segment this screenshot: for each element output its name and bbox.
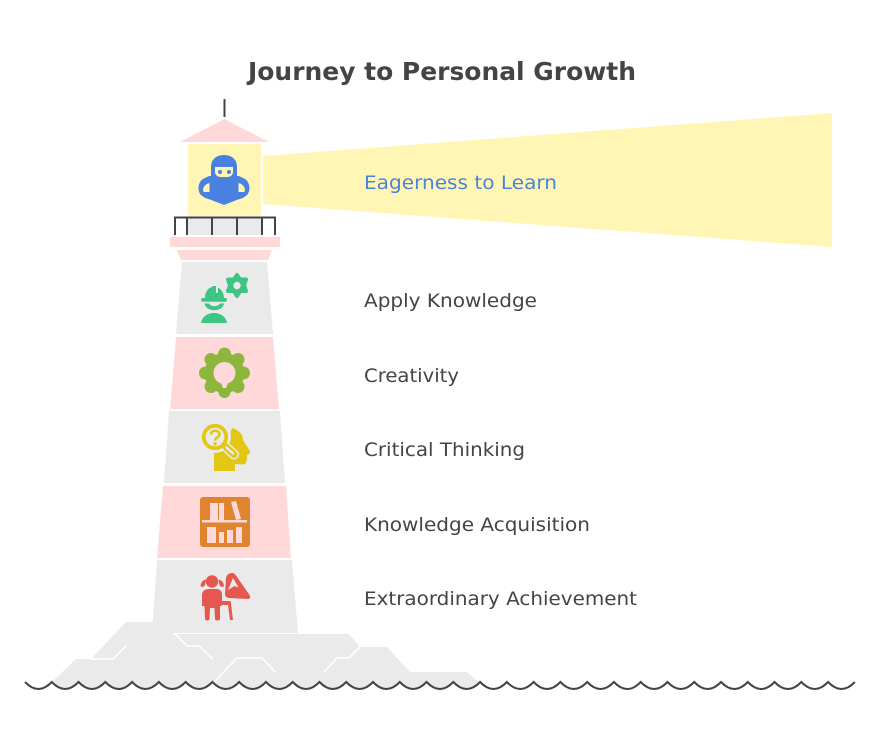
- panel: apply knowledge: [176, 262, 273, 334]
- rocks: [51, 622, 479, 689]
- roof: [180, 119, 269, 142]
- label: eagerness to learn: Eagerness to Learn: [364, 172, 557, 194]
- label: apply knowledge: Apply Knowledge: [364, 290, 537, 312]
- label: creativity: Creativity: [364, 365, 459, 387]
- lighthouse: [51, 99, 479, 689]
- icon: climber and mountain: [200, 573, 250, 620]
- waves: [25, 682, 855, 689]
- panel: critical thinking: [164, 411, 285, 483]
- light beam: [263, 113, 832, 247]
- icon: person reading: [199, 155, 249, 205]
- label: knowledge acquisition: Knowledge Acquisition: [364, 514, 590, 536]
- gallery base: [177, 250, 272, 260]
- panel: creativity: [170, 337, 279, 409]
- label: critical thinking: Critical Thinking: [364, 439, 525, 461]
- gallery deck: [170, 237, 280, 247]
- icon: creativity gear: [199, 348, 250, 398]
- panel: knowledge acquisition: [157, 486, 291, 558]
- icon: worker with gear: [201, 275, 246, 323]
- gallery railing: [175, 218, 275, 235]
- title: Journey to Personal Growth: [246, 57, 636, 86]
- lantern room: [188, 144, 261, 216]
- label: extraordinary achievement: Extraordinary Achievement: [364, 588, 637, 610]
- icon: head with magnifier: [199, 421, 250, 471]
- icon: bookshelf: [200, 497, 250, 547]
- lantern spire: [224, 99, 226, 117]
- panel: extraordinary achievement: [152, 560, 298, 633]
